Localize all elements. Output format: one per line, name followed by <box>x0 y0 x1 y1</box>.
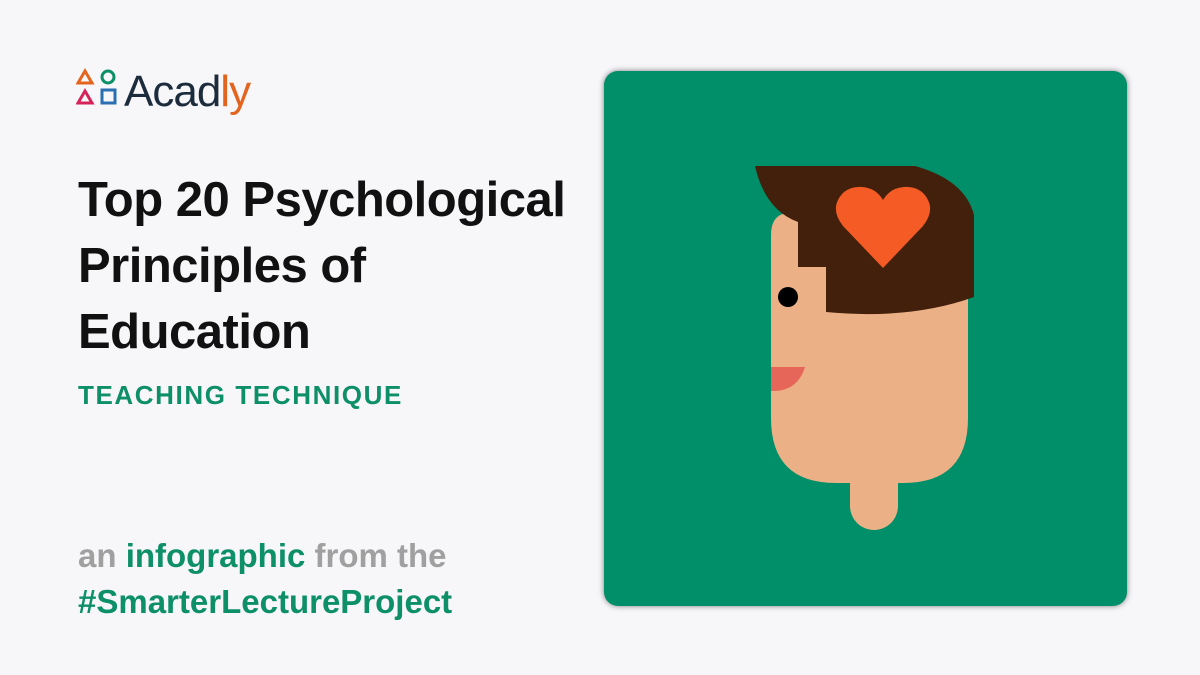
footer text: an infographic from the <box>78 537 447 574</box>
icon: logo shapes <box>78 71 115 103</box>
title: Principles of <box>78 239 366 293</box>
title: Education <box>78 305 310 359</box>
footer text <box>78 537 452 620</box>
title: Top 20 Psychological <box>78 173 565 227</box>
title <box>78 173 565 359</box>
icon: head <box>755 166 974 530</box>
panel: illustration <box>604 71 1127 606</box>
logo: Acadly <box>124 68 251 116</box>
subtitle: TEACHING TECHNIQUE <box>78 380 403 410</box>
footer text: #SmarterLectureProject <box>78 583 452 620</box>
